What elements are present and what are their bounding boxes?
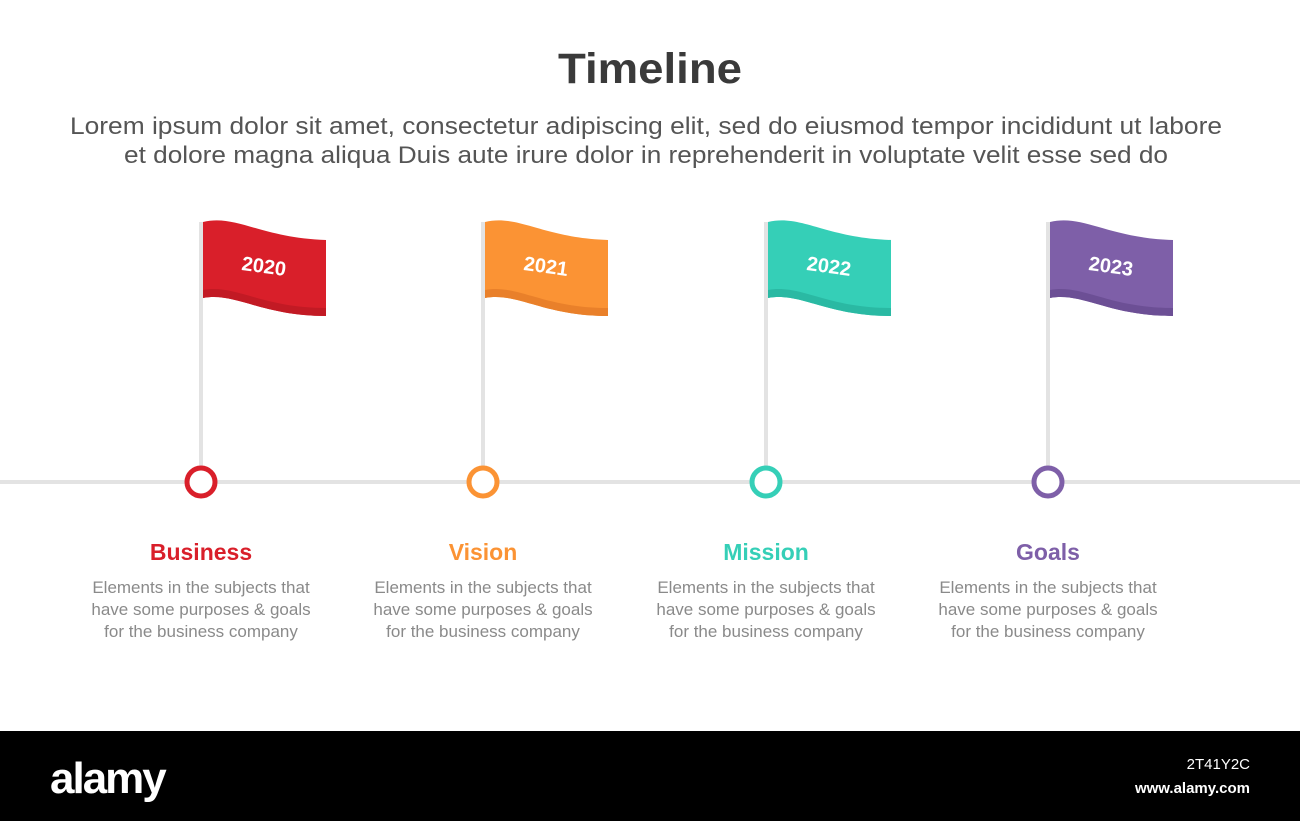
footer bar: 2T41Y2C — [1187, 756, 1250, 773]
milestone 2020: 2020 — [240, 253, 287, 281]
descriptions: for the business company — [669, 622, 863, 641]
footer bar: www.alamy.com — [1134, 780, 1250, 797]
descriptions: have some purposes & goals — [938, 600, 1158, 619]
milestone 2022 — [723, 220, 891, 565]
milestone 2023 — [1016, 220, 1173, 565]
descriptions: have some purposes & goals — [373, 600, 593, 619]
descriptions: Elements in the subjects that — [939, 578, 1157, 597]
milestone 2020 — [150, 220, 326, 565]
milestone 2020: Business — [150, 539, 252, 565]
footer bar: alamy — [50, 754, 167, 803]
descriptions: for the business company — [386, 622, 580, 641]
descriptions: for the business company — [104, 622, 298, 641]
descriptions: Elements in the subjects that — [657, 578, 875, 597]
milestone 2022: 2022 — [805, 253, 852, 281]
milestone 2021: 2021 — [522, 253, 569, 281]
milestone 2021 — [449, 220, 608, 565]
subtitle text: Lorem ipsum dolor sit amet, consectetur adipiscing elit, sed do eiusmod tempor incididunt ut labore — [70, 113, 1222, 140]
footer bar — [0, 731, 1300, 821]
descriptions: Elements in the subjects that — [92, 578, 310, 597]
milestone 2023: Goals — [1016, 539, 1080, 565]
milestone 2022: Mission — [723, 539, 809, 565]
milestone 2023: 2023 — [1087, 253, 1134, 281]
subtitle text: et dolore magna aliqua Duis aute irure dolor in reprehenderit in voluptate velit esse sed do — [124, 142, 1168, 169]
descriptions: for the business company — [951, 622, 1145, 641]
descriptions: have some purposes & goals — [656, 600, 876, 619]
descriptions: have some purposes & goals — [91, 600, 311, 619]
subtitle text — [70, 113, 1222, 169]
timeline line — [0, 480, 1300, 484]
title: Timeline — [558, 45, 742, 93]
milestone 2021: Vision — [449, 539, 517, 565]
descriptions: Elements in the subjects that — [374, 578, 592, 597]
descriptions — [91, 578, 1158, 641]
